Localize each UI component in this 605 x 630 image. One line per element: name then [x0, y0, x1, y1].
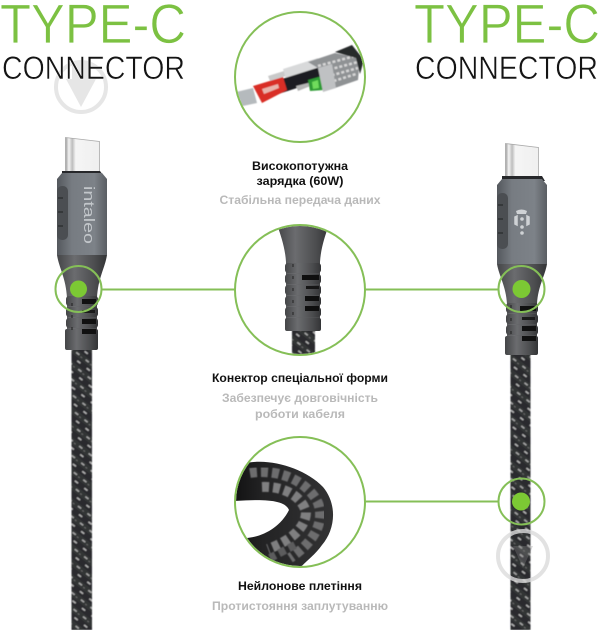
circle: strain relief — [235, 224, 365, 365]
marker: right cable — [498, 478, 544, 524]
text: special connector shape: роботи кабеля — [255, 409, 345, 421]
text: nylon braid: Протистояння заплутуванню — [212, 601, 388, 613]
marker: left connector — [56, 266, 102, 312]
title: left TYPE-C CONNECTOR: CONNECTOR — [2, 50, 185, 86]
text: high-power charging: зарядка (60W) — [256, 176, 344, 188]
title: left TYPE-C CONNECTOR — [0, 0, 186, 86]
text: high-power charging — [220, 161, 381, 207]
text: nylon braid — [212, 581, 388, 613]
circle: cable cross-section — [235, 12, 365, 142]
connector line: left marker to middle circle — [101, 288, 235, 290]
left cable with connector — [57, 138, 107, 630]
text: special connector shape: Забезпечує довговічність — [222, 393, 378, 405]
right cable with connector — [497, 144, 547, 630]
left cable with connector: intaleo — [80, 186, 97, 244]
text: nylon braid: Нейлонове плетіння — [238, 581, 362, 593]
connector line: right cable marker to bottom circle — [365, 500, 499, 502]
title: right TYPE-C CONNECTOR — [414, 0, 600, 86]
circle: nylon braid — [230, 437, 365, 570]
text: special connector shape: Конектор спеціальної форми — [212, 373, 388, 385]
watermark: bottom right download icon — [498, 531, 548, 581]
connector line: right marker to middle circle — [365, 288, 499, 290]
text: high-power charging: Стабільна передача даних — [220, 195, 381, 207]
watermark: top left download icon — [56, 62, 106, 112]
text: special connector shape — [212, 373, 388, 421]
text: high-power charging: Високопотужна — [252, 161, 349, 173]
marker: right connector — [498, 266, 544, 312]
